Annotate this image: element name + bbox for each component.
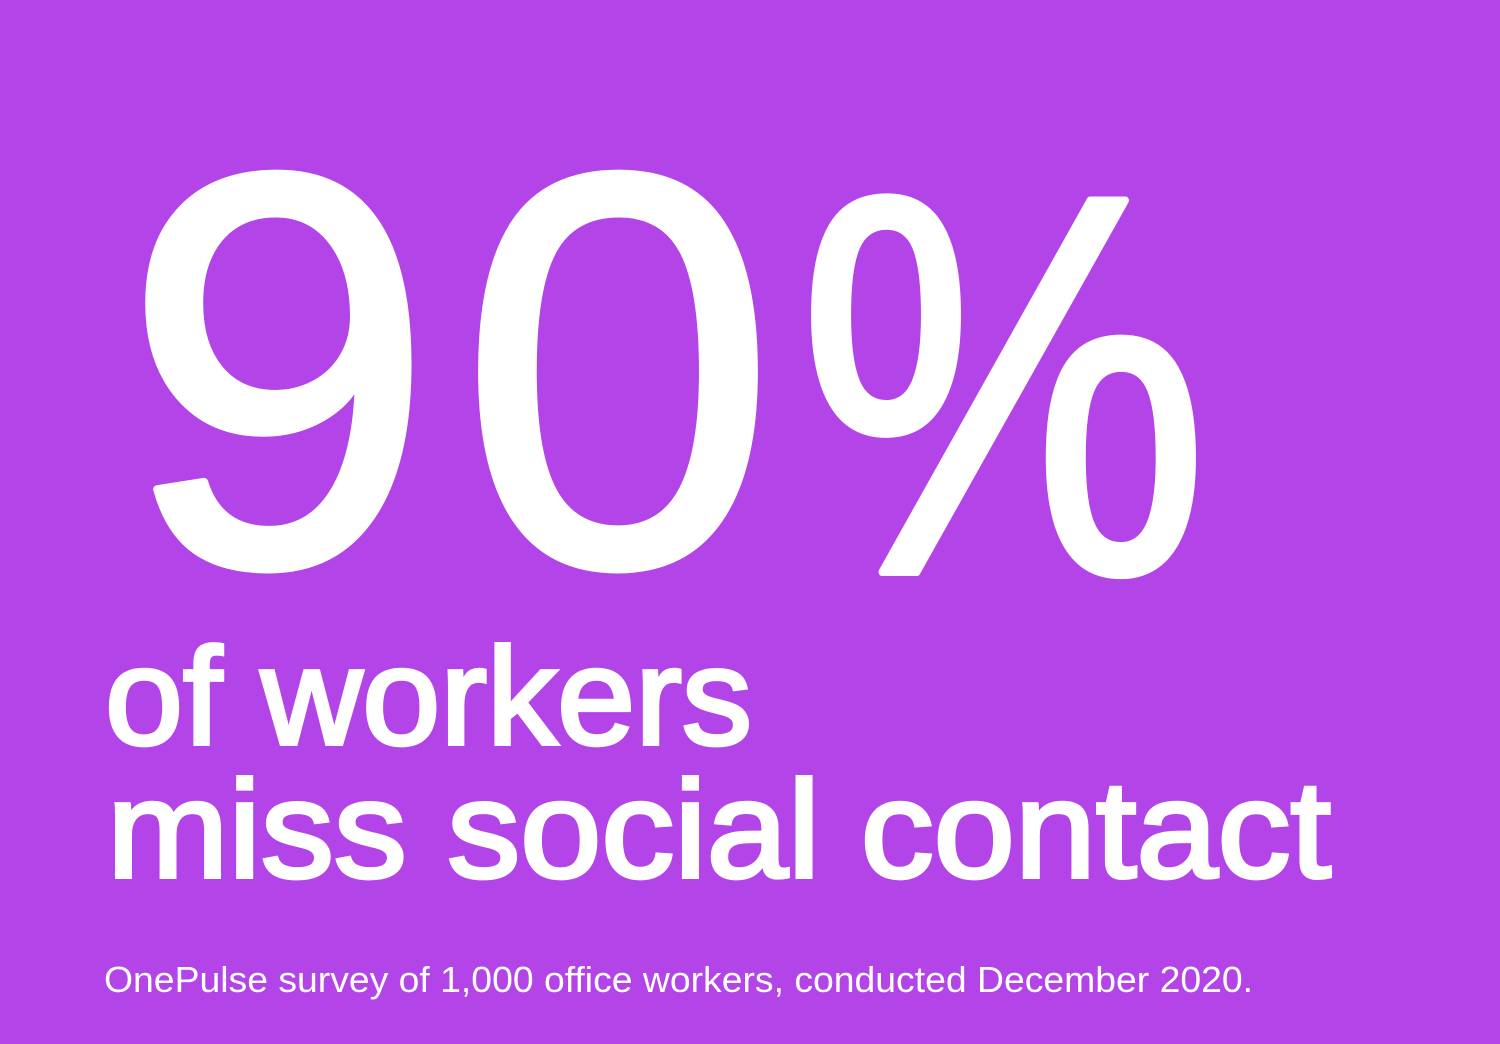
big statistic: 90%: % — [798, 84, 1209, 687]
source note: OnePulse survey of 1,000 office workers, conducted December 2020. — [104, 959, 1253, 1000]
heading: of workers miss social contact: miss social contact — [107, 753, 1331, 907]
big statistic: 90%: 9 — [123, 59, 434, 683]
heading: of workers miss social contact: of workers — [105, 620, 752, 774]
big statistic: 90%: 0 — [460, 59, 776, 683]
heading: of workers miss social contact — [105, 620, 1331, 907]
big statistic: 90% — [123, 59, 1209, 687]
